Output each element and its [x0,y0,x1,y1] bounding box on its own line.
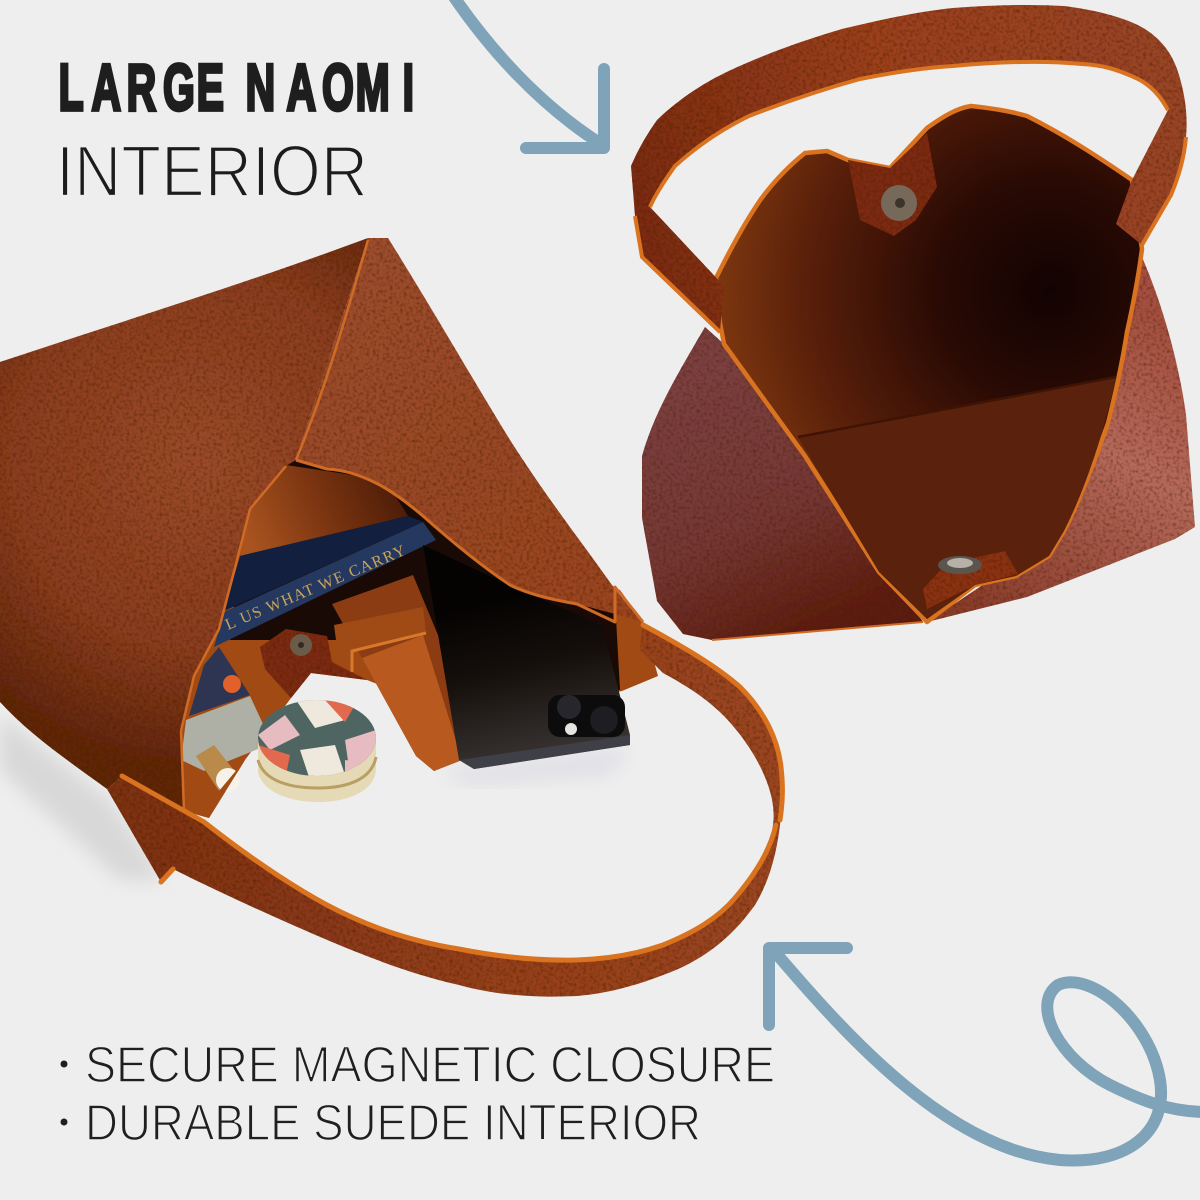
dark interior [230,455,620,700]
right bag photo [631,5,1195,640]
heading: interior: INTERIOR [56,132,368,212]
title [56,50,414,212]
soft ground shadow [0,715,165,880]
seam and opening edges [181,240,643,811]
left bag photo [0,238,782,997]
bottom edge line [712,622,923,640]
book title: L US WHAT WE CARRY [223,542,409,634]
front flap leather [296,238,643,622]
interior back fold [798,377,1116,437]
magnetic tab [260,629,367,698]
bullet: secure magnetic closure: SECURE MAGNETIC CLOSURE [85,1036,775,1093]
phone ground shadow [440,748,630,785]
interior floor suede [798,377,1116,619]
strap orange edges [122,625,782,960]
top magnetic tab [848,133,937,236]
phone [423,545,630,769]
suede interior [716,106,1142,622]
arrow: bottom looping arrow pointing at strap [769,948,1200,1160]
heading: large naomi: LARGE NAOMI [59,50,414,124]
strap [631,5,1187,332]
right exterior panel [927,257,1195,622]
bag body leather [0,238,368,822]
arrow: top pointing at right bag [452,0,604,148]
compact tin [258,700,376,802]
perfume bottle [181,647,263,792]
left exterior panel [642,327,923,640]
leather notebook [240,465,408,556]
strap [107,622,782,997]
bottom magnetic tab [923,551,1018,609]
bullet: durable suede interior: DURABLE SUEDE INTERIOR [85,1094,701,1151]
strap orange edges [635,62,1186,332]
blue book [214,516,436,647]
orange wallet [332,575,462,771]
feature list [60,1036,775,1151]
lower suede lining [181,760,245,818]
interior suede [181,450,658,818]
